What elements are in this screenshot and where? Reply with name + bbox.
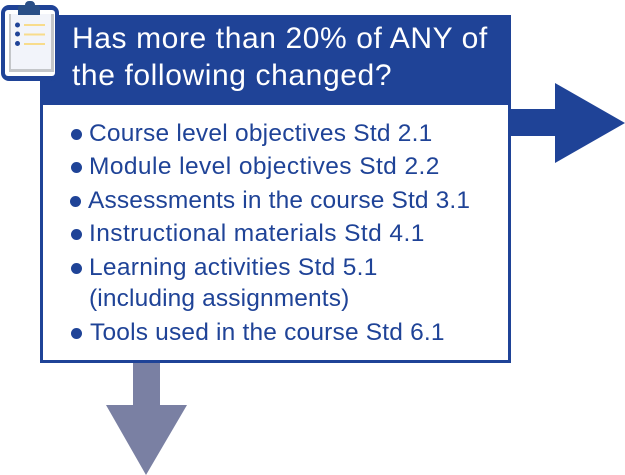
- heading text: Has more than 20% of ANY of: [72, 22, 488, 55]
- bullet list: [70, 120, 470, 346]
- icon: clipboard: [1, 1, 59, 81]
- bullet item 6: Tools used in the course Std 6.1: [90, 319, 445, 346]
- bullet item 3: Assessments in the course Std 3.1: [88, 187, 470, 214]
- heading text: [72, 22, 488, 92]
- bullet item 5: Learning activities Std 5.1: [89, 254, 378, 281]
- bullet item 2: Module level objectives Std 2.2: [89, 153, 440, 180]
- bullet item 4: Instructional materials Std 4.1: [89, 220, 425, 247]
- bullet item 5 continuation: (including assignments): [89, 285, 349, 312]
- heading panel: [40, 15, 511, 105]
- panel: criteria list: [40, 100, 511, 363]
- heading text: the following changed?: [72, 59, 392, 92]
- bullet item 1: Course level objectives Std 2.1: [89, 120, 433, 147]
